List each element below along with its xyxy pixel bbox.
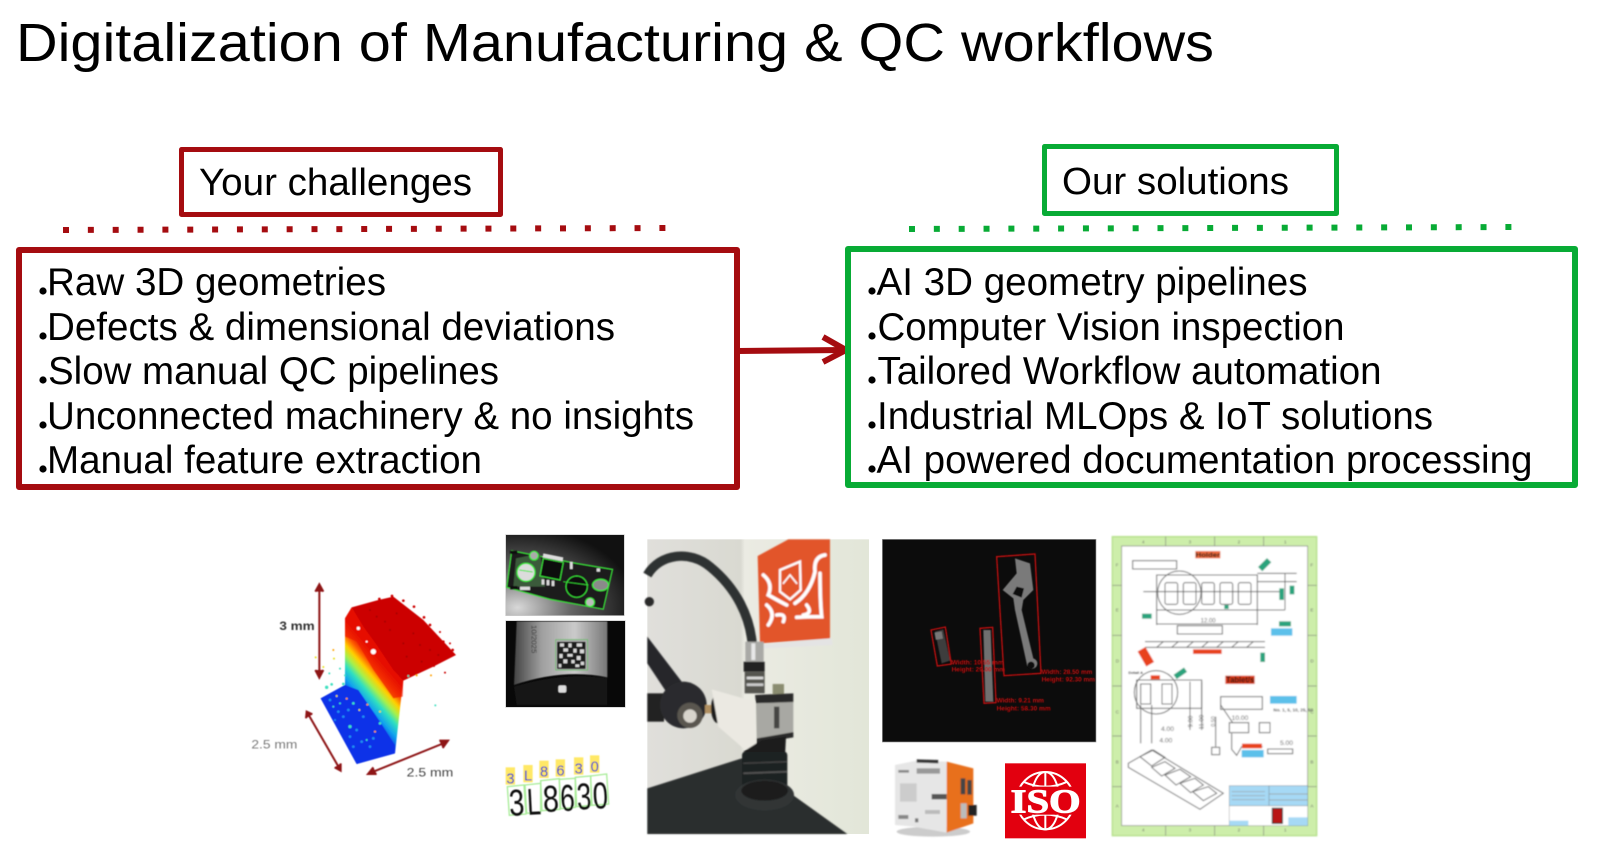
panel: challenges list: Slow manual QC pipelines [48, 350, 499, 393]
drawing: annotated technical drawing: 3 [1189, 828, 1192, 833]
photo: industrial camera on arm [645, 539, 869, 834]
dimension labels: 3 mm [279, 619, 315, 633]
image: OCR character detection: L [524, 769, 532, 785]
logo: ISO: ISO [1011, 784, 1081, 821]
heading: your challenges [182, 150, 500, 214]
image: OCR character detection: 3 [508, 781, 525, 824]
drawing: annotated technical drawing: C [1310, 709, 1314, 714]
heading: our solutions [1044, 146, 1336, 214]
drawing: annotated technical drawing: 2 [1238, 540, 1241, 545]
drawing: annotated technical drawing: 4.00 [1159, 738, 1173, 745]
title: Digitalization of Manufacturing & QC workflows [16, 13, 1214, 73]
drawing: annotated technical drawing: A [1116, 804, 1120, 809]
logo poster [758, 539, 833, 649]
panel: solutions list: Industrial MLOps & IoT solutions [877, 395, 1433, 438]
image: OCR character detection: 3 [575, 762, 583, 778]
drawing: annotated technical drawing: B [1116, 759, 1119, 764]
image: OCR character detection: 6 [559, 776, 576, 819]
logo: ISO [1005, 763, 1086, 838]
image: OCR character detection: 3 [506, 771, 514, 787]
drawing: annotated technical drawing: 11.00 [1199, 714, 1205, 729]
image: wrench measurement detection: Width: 28.50 mm [1042, 669, 1093, 676]
heading: your challenges: Your challenges [199, 162, 472, 204]
arrows: dimension markers [306, 584, 448, 774]
dimension labels: 2.5 mm [251, 738, 297, 752]
panel: challenges list [19, 250, 737, 487]
drawing: annotated technical drawing: 0.50 [1211, 716, 1217, 727]
drawing: annotated technical drawing: Detail A [1128, 670, 1143, 675]
dimension labels: 2.5 mm [407, 765, 453, 779]
image: OCR character detection: 0 [592, 774, 609, 817]
panel: challenges list: Defects & dimensional deviations [47, 306, 615, 349]
drawing: annotated technical drawing: A [1310, 804, 1314, 809]
photo: data matrix code reading [506, 621, 625, 707]
image: OCR character detection: 3 [576, 775, 592, 818]
panel: solutions list: AI powered documentation processing [876, 439, 1532, 482]
image: wrench measurement detection [882, 539, 1096, 742]
arrow: challenges to solutions [738, 337, 846, 362]
drawing: annotated technical drawing: 12.00 [1201, 619, 1216, 625]
image: OCR character detection: 8 [540, 765, 548, 781]
panel: solutions list: Tailored Workflow automation [878, 350, 1382, 393]
photo: data matrix code reading: 10/2025 [530, 625, 539, 653]
drawing: annotated technical drawing: B [1310, 759, 1313, 764]
dimension labels [251, 619, 453, 779]
photo: circuit board inspection [506, 535, 624, 616]
drawing: annotated technical drawing: F [1116, 563, 1119, 568]
drawing: annotated technical drawing [1112, 537, 1317, 836]
drawing: annotated technical drawing: No. 1, 5, 10, 25, 50 [1273, 708, 1314, 713]
panel: solutions list: Computer Vision inspection [878, 306, 1344, 349]
drawing: annotated technical drawing: 9.00 [1189, 715, 1195, 727]
drawing: annotated technical drawing: F [1310, 563, 1313, 568]
drawing: annotated technical drawing: E [1310, 608, 1313, 613]
image: OCR character detection: 8 [542, 777, 560, 820]
drawing: annotated technical drawing: 1 [1284, 540, 1287, 545]
image: OCR character detection: L [526, 780, 542, 823]
image: OCR character detection: 6 [556, 763, 564, 779]
drawing: annotated technical drawing: 2 [1238, 828, 1241, 833]
drawing: annotated technical drawing: Holder [1196, 552, 1220, 559]
drawing: annotated technical drawing: 1 [1284, 828, 1287, 833]
image: wrench measurement detection: Width: 9.21 mm [997, 698, 1044, 705]
heading: our solutions: Our solutions [1062, 161, 1289, 203]
panel: solutions list: AI 3D geometry pipelines [876, 261, 1308, 304]
drawing: annotated technical drawing: D [1116, 658, 1120, 663]
image: wrench measurement detection: Height: 58.30 mm [997, 705, 1051, 712]
panel: challenges list: Unconnected machinery & no insights [47, 395, 694, 438]
drawing: annotated technical drawing: 4 [1142, 828, 1145, 833]
figure: 3D point cloud with dimensions [251, 584, 456, 779]
image: OCR character detection: 0 [591, 759, 599, 775]
drawing: annotated technical drawing: Tablet/s [1226, 676, 1255, 685]
image: wrench measurement detection: Height: 92.30 mm [1042, 677, 1095, 684]
drawing: annotated technical drawing: D [1310, 658, 1314, 663]
drawing: annotated technical drawing: 5.00 [1280, 740, 1293, 747]
panel: challenges list: Manual feature extraction [47, 439, 482, 482]
image: wrench measurement detection: Width: 10.55 mm [952, 659, 1004, 666]
drawing: annotated technical drawing: 3 [1189, 540, 1192, 545]
panel: solutions list [848, 249, 1575, 485]
drawing: annotated technical drawing: C [1116, 709, 1120, 714]
drawing: annotated technical drawing: E [1116, 608, 1119, 613]
photo: IoT controller module [895, 759, 977, 837]
image: OCR character detection [506, 755, 609, 824]
panel: challenges list: Raw 3D geometries [47, 261, 386, 304]
drawing: annotated technical drawing: 4.00 [1161, 726, 1174, 733]
drawing: annotated technical drawing: 4 [1142, 540, 1145, 545]
image: wrench measurement detection: Height: 29.00 mm [952, 666, 1005, 673]
drawing: annotated technical drawing: 10.00 [1232, 715, 1249, 722]
